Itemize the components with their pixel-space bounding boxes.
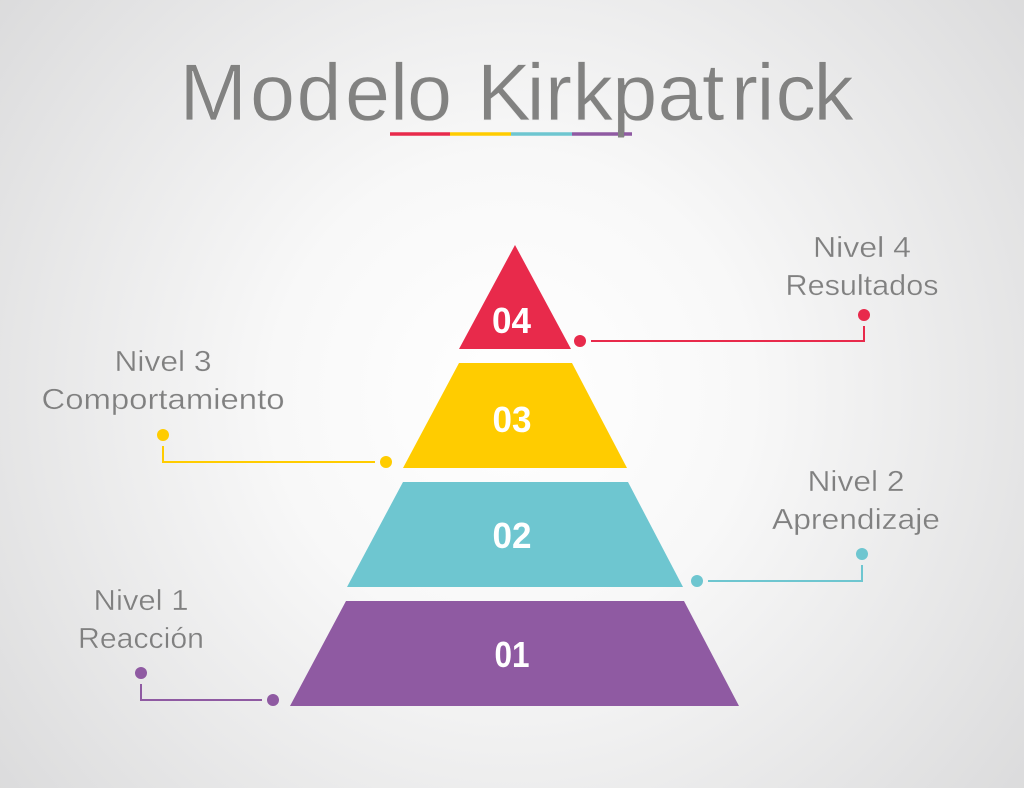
- connector: Nivel 1: [135, 667, 279, 706]
- label: Nivel 3: Comportamiento: [42, 384, 284, 416]
- level 04: 04: [492, 300, 531, 341]
- pyramid: [290, 245, 739, 706]
- connector: Nivel 4: [574, 309, 870, 347]
- label: Nivel 1: Reacción: [78, 623, 204, 655]
- level 04: [459, 245, 571, 349]
- connector: Nivel 2: [691, 548, 868, 587]
- label: Nivel 3: Nivel 3: [114, 346, 212, 378]
- title underline: [390, 130, 632, 138]
- level 03: [403, 363, 627, 468]
- title: Modelo Kirkpatrick: [180, 48, 854, 138]
- label: Nivel 1: [78, 585, 204, 655]
- level 01: [290, 601, 739, 706]
- level 01: 01: [494, 634, 530, 675]
- level 03: 03: [492, 399, 532, 440]
- level 02: 02: [492, 515, 532, 556]
- label: Nivel 2: Aprendizaje: [772, 504, 940, 536]
- level 02: [347, 482, 683, 587]
- label: Nivel 4: Nivel 4: [813, 232, 911, 264]
- label: Nivel 2: Nivel 2: [808, 466, 904, 498]
- label: Nivel 4: [786, 232, 938, 302]
- label: Nivel 1: Nivel 1: [94, 585, 188, 617]
- label: Nivel 2: [772, 466, 940, 536]
- connector: Nivel 3: [157, 429, 392, 468]
- label: Nivel 4: Resultados: [786, 270, 938, 302]
- label: Nivel 3: [42, 346, 284, 416]
